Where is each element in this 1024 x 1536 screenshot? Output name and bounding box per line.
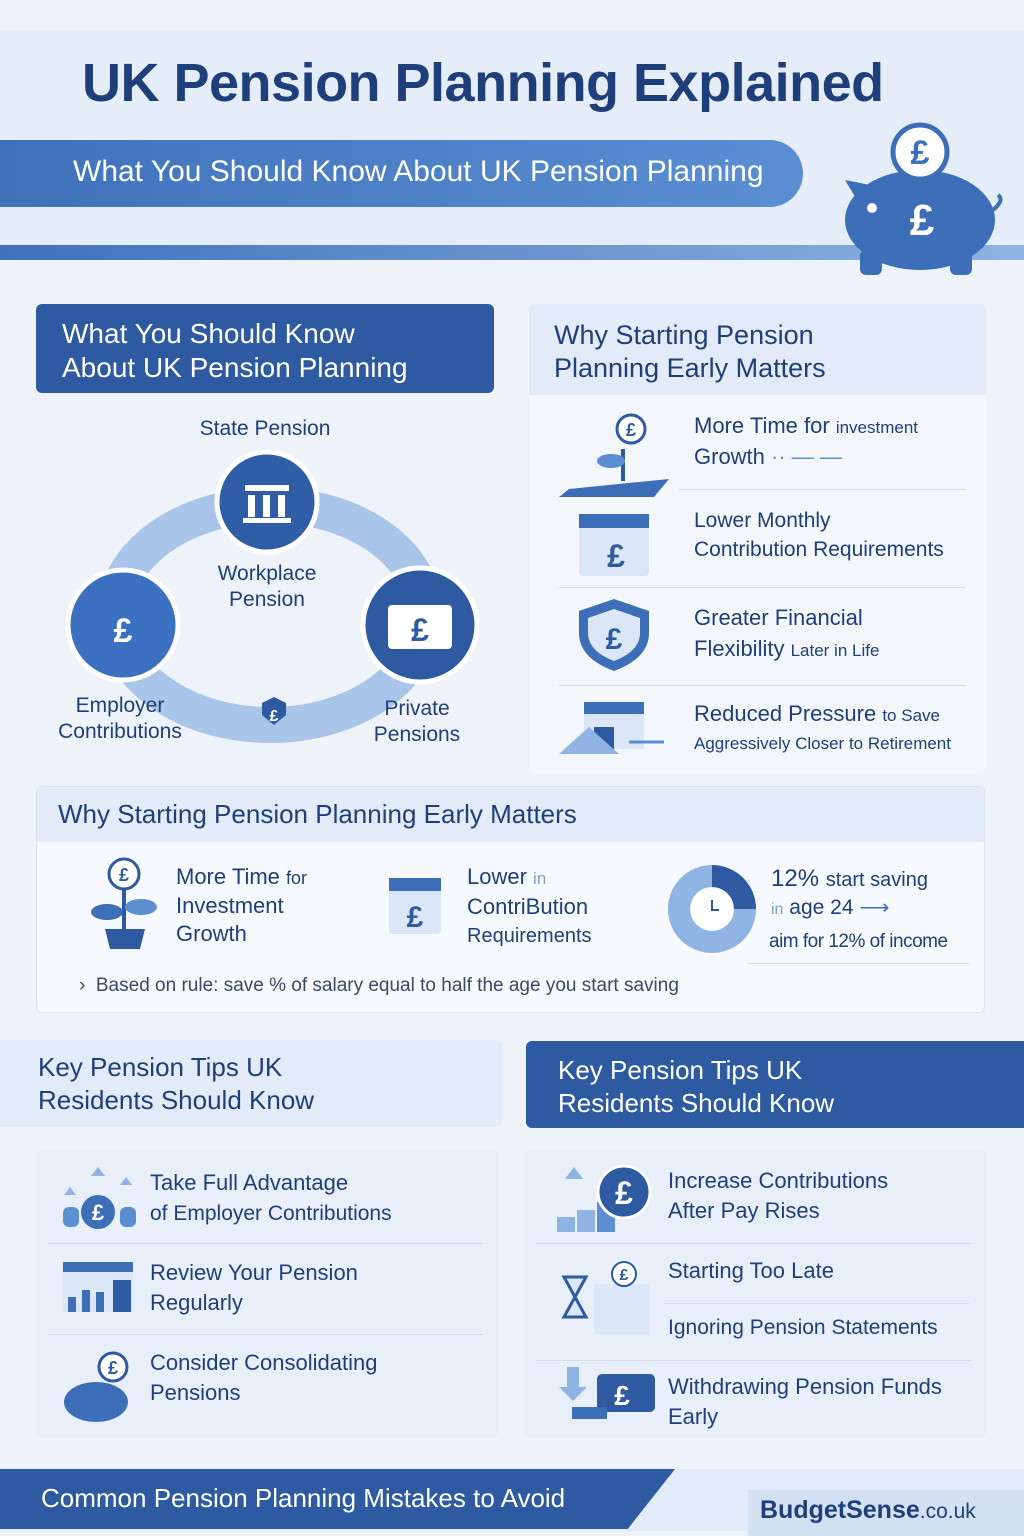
text: more time: Growth [176,921,247,946]
icons [559,414,669,754]
icon: piggy bank [845,122,1003,275]
chart: pension cycle: Contributions [58,720,182,743]
mistake: withdrawing early [668,1374,942,1429]
panel: why starting early (middle) [36,786,985,1013]
text: lower contribution [467,864,592,947]
heading: tips right: Residents Should Know [558,1088,834,1118]
icons: £ [626,420,636,440]
chart: pension cycle: Private [384,697,450,720]
icon: piggy bank: £ [911,134,930,172]
chart: pension cycle: £ [270,708,279,725]
panel: tips right: £ [614,1380,630,1411]
item 4: Aggressively Closer to Retirement [694,734,951,753]
heading [37,787,984,842]
chart: pension cycle: £ [411,612,429,648]
footnote: › Based on rule: save % of salary equal to half the age you start saving [79,975,679,996]
mistake: withdrawing early: Withdrawing Pension Funds [668,1374,942,1399]
item 2: Contribution Requirements [694,538,944,561]
icon: calendar [389,878,441,934]
chart: pension cycle: Pensions [374,723,460,746]
footer: mistakes banner [0,1469,675,1529]
heading: tips left: Residents Should Know [38,1085,314,1115]
tip: increase contributions: Increase Contributions [668,1168,888,1193]
item 1 [694,413,918,469]
panel: tips right: £ [615,1175,633,1211]
chart: pension cycle: State Pension [200,417,330,440]
heading: tips right [526,1041,1024,1128]
title: UK Pension Planning Explained [82,53,884,113]
text: more time: Investment [176,893,284,918]
tip 2: Regularly [150,1290,243,1315]
chart: pension cycle [58,417,480,746]
mistake: withdrawing early: Early [668,1404,718,1429]
subtitle bar: What You Should Know About UK Pension Planning [73,155,764,188]
panel: why starting early (right) [529,304,986,773]
heading: Why Starting Pension [554,320,814,350]
item 1: Growth ·· — — [694,444,842,469]
panel: tips right [524,1150,987,1437]
panel: tips right: £ [620,1267,629,1284]
text: lower contribution: Lower in [467,864,546,889]
heading: tips right: Key Pension Tips UK [558,1055,802,1085]
icon: plant [91,858,157,949]
tip 3: Consider Consolidating [150,1350,377,1375]
panel: tips left [36,1150,499,1437]
panel: what you should know header: What You Should Know [62,318,355,349]
icon: calendar: £ [407,901,424,934]
item 2 [694,509,944,561]
stripe [0,245,1024,260]
footer: mistakes banner: Common Pension Planning Mistakes to Avoid [41,1483,565,1513]
subtitle bar [0,140,803,207]
panel: tips left: £ [108,1358,118,1378]
tip: increase contributions: After Pay Rises [668,1198,820,1223]
text: lower contribution: Requirements [467,925,592,947]
icons: £ [607,538,625,574]
tip 1 [150,1170,392,1225]
text: lower contribution: ContriBution [467,894,588,919]
panel: tips left: £ [92,1200,105,1225]
item 1: More Time for investment [694,413,918,438]
text: more time: More Time for [176,864,307,889]
tip 1: of Employer Contributions [150,1202,392,1225]
item 3: Flexibility Later in Life [694,636,879,661]
panel: why starting early (middle): aim for 12% of income [769,931,948,952]
icon: piggy bank: £ [910,196,935,245]
footer: brand [748,1490,1024,1536]
item 4 [694,701,951,753]
item 3: Greater Financial [694,605,863,630]
icon: plant: £ [119,865,129,885]
heading: Planning Early Matters [554,353,826,383]
chart: pension cycle: £ [114,612,133,650]
item 2: Lower Monthly [694,509,831,532]
tip 3: Pensions [150,1380,241,1405]
heading [529,304,986,395]
tip 1: Take Full Advantage [150,1170,348,1195]
chart: donut 12% [668,865,756,953]
panel: why starting early (middle): in age 24 ⟶ [771,896,889,919]
chart: pension cycle: Employer [76,694,164,717]
tip 2: Review Your Pension [150,1260,358,1285]
tip 3 [150,1350,377,1405]
item 3 [694,605,879,661]
tip: increase contributions [668,1168,888,1223]
tip 2 [150,1260,358,1315]
header band [0,30,1024,245]
item 4: Reduced Pressure to Save [694,701,940,726]
heading: tips left: Key Pension Tips UK [38,1052,282,1082]
heading: tips left [0,1040,502,1127]
chart: pension cycle: Workplace [218,562,316,585]
icons: £ [606,623,623,656]
text: 12%: 12% start saving [771,865,928,892]
chart: pension cycle: Pension [229,588,305,611]
panel: what you should know header [36,304,494,393]
footer band [0,1469,1024,1531]
mistake: starting late: Starting Too Late [668,1258,834,1283]
text: more time [176,864,307,946]
footer: brand: BudgetSense.co.uk [760,1496,976,1524]
panel: what you should know header: About UK Pension Planning [62,352,408,383]
heading: Why Starting Pension Planning Early Matters [58,799,577,829]
mistake: ignoring statements: Ignoring Pension Statements [668,1316,938,1339]
